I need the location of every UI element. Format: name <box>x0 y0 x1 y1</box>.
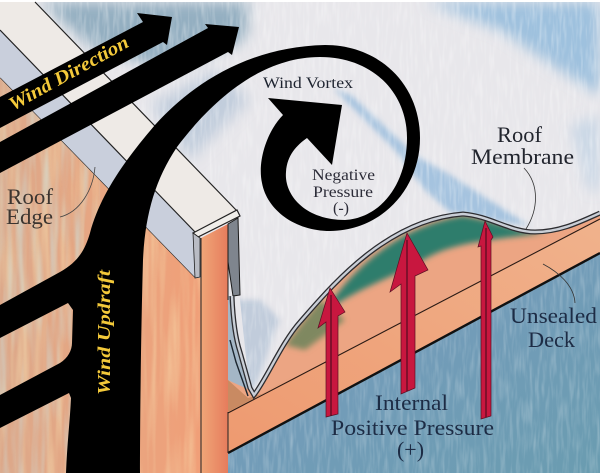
label: negative pressure: Pressure <box>313 184 373 201</box>
panel: blue interior <box>228 253 600 473</box>
panel: air cavity under membrane <box>228 216 600 412</box>
leader: roof membrane <box>524 168 536 229</box>
label: unsealed deck: Unsealed <box>510 303 597 328</box>
blue streak crossing the vortex ring <box>333 88 530 226</box>
label: internal positive pressure: (+) <box>397 437 424 462</box>
label: wind direction: Wind Direction <box>5 32 133 115</box>
panel: sloped deck <box>228 219 600 453</box>
arrow: lower wind direction <box>0 24 239 173</box>
label: roof membrane: Roof <box>497 122 543 147</box>
wind direction arrows <box>0 13 239 173</box>
red arrows: internal positive pressure <box>318 221 493 419</box>
leader: roof edge <box>60 167 95 217</box>
label: roof membrane <box>471 122 574 169</box>
label: wind vortex: Wind Vortex <box>263 75 353 92</box>
label: internal positive pressure <box>331 390 494 462</box>
label: roof edge <box>6 184 54 229</box>
roof membrane <box>232 213 600 395</box>
arrow 1 <box>318 288 345 417</box>
wind updraft, branches and vortex swirl <box>0 45 420 473</box>
label: roof edge: Edge <box>6 204 53 229</box>
label: internal positive pressure: Positive Pressure <box>331 415 494 440</box>
label: roof membrane: Membrane <box>471 144 574 169</box>
panel: sky above the roof membrane <box>39 2 600 389</box>
label: internal positive pressure: Internal <box>375 390 448 415</box>
label: unsealed deck: Deck <box>528 327 575 352</box>
arrow 3 <box>478 221 493 419</box>
label: wind updraft: Wind Updraft <box>94 269 114 395</box>
label: negative pressure: Negative <box>312 167 375 184</box>
panel: vertical post <box>201 224 228 473</box>
label: negative pressure <box>312 167 375 217</box>
top margin <box>0 0 600 2</box>
label: negative pressure: (-) <box>333 200 349 217</box>
panel: metal flashing front <box>193 210 240 296</box>
label: roof edge: Roof <box>7 184 54 209</box>
arrow: top wind direction <box>0 13 172 128</box>
label: unsealed deck <box>510 303 597 352</box>
arrow 2 <box>390 233 428 394</box>
panel: left orange wall <box>0 70 201 473</box>
panel: roof edge coping <box>0 2 238 278</box>
leader: unsealed deck <box>543 264 575 303</box>
